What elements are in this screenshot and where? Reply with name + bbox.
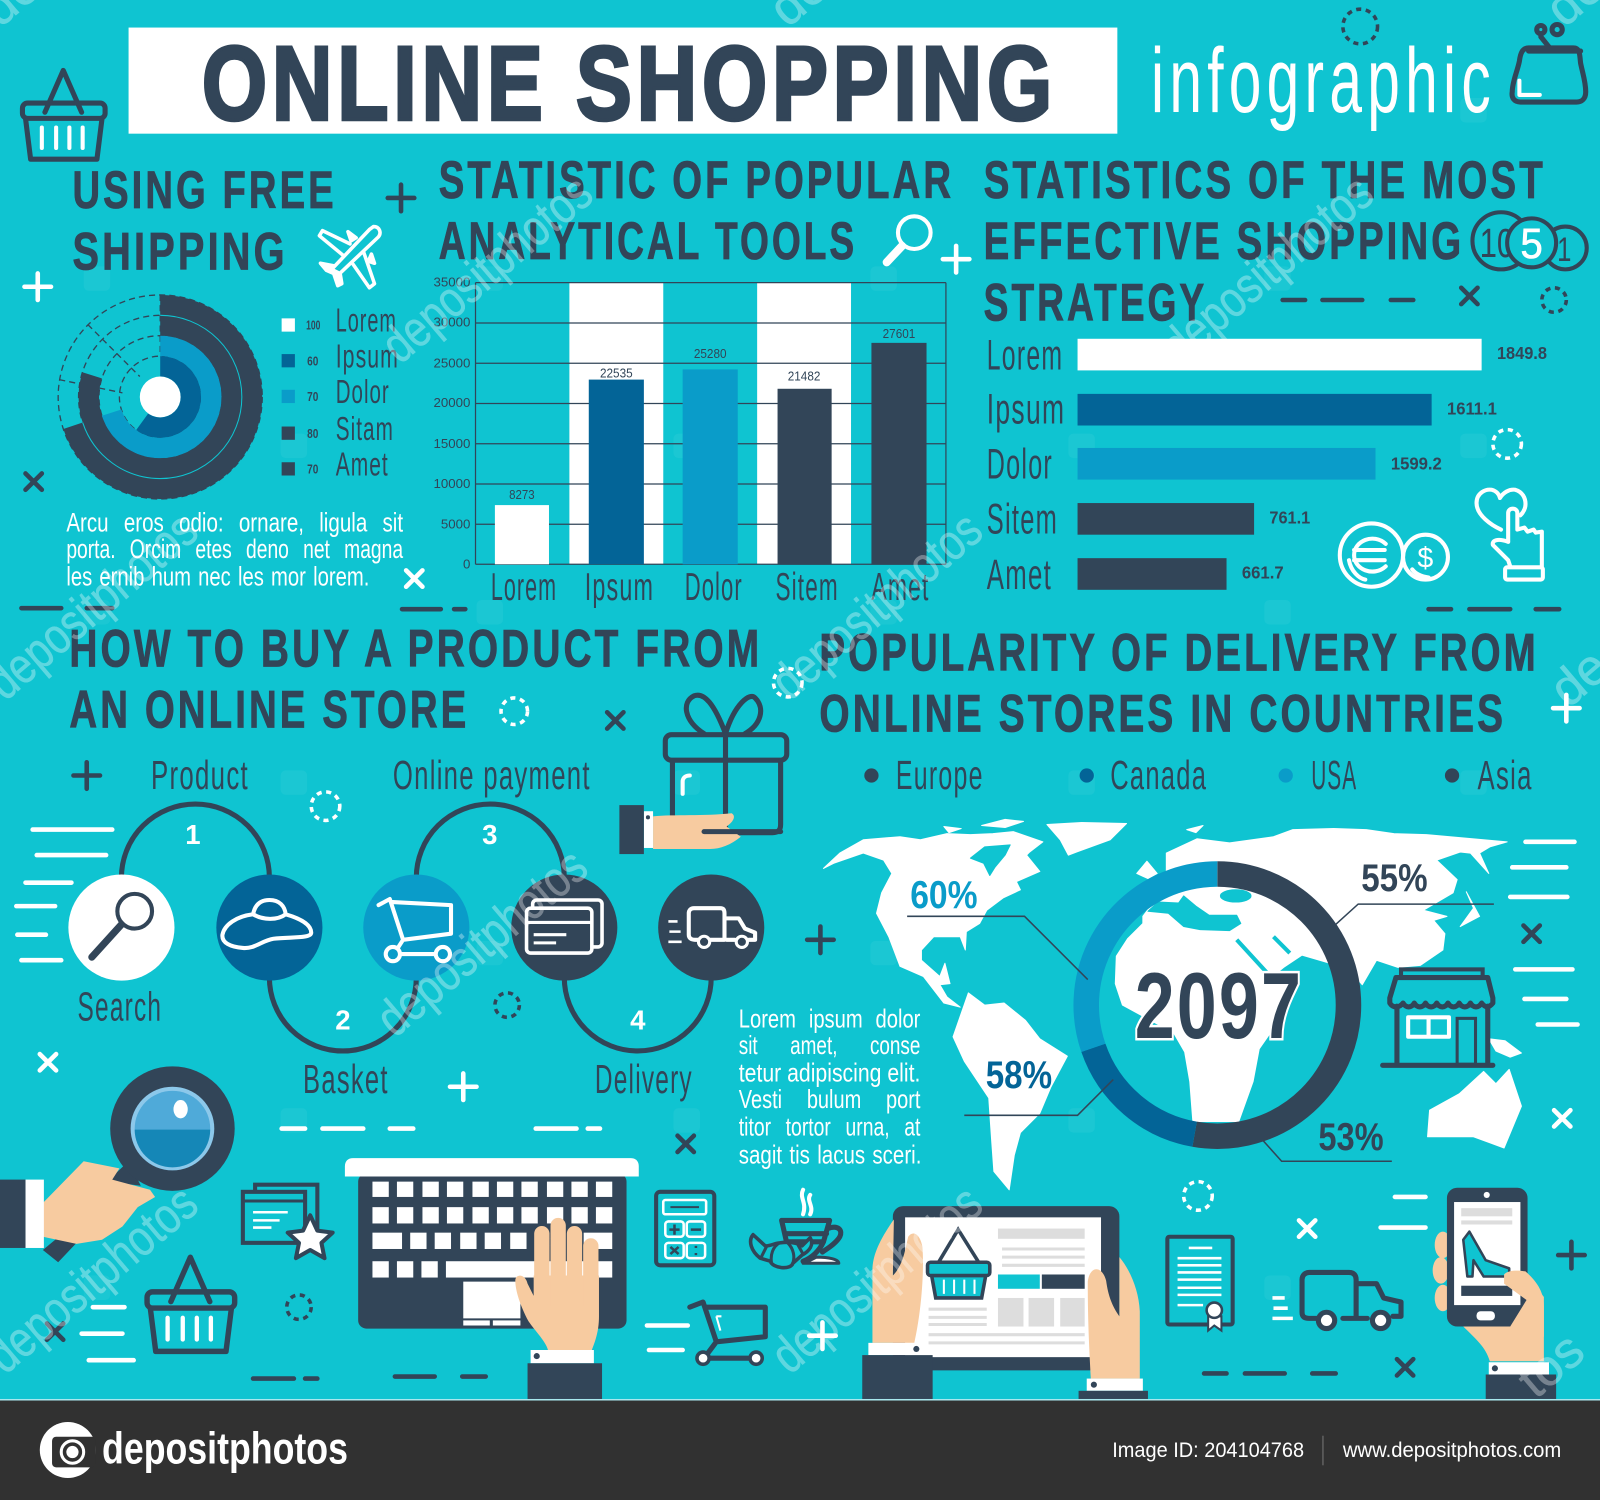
icon: airplane [319, 227, 380, 288]
bar chart: 25000 [434, 355, 470, 370]
heading: SHIPPING [72, 222, 288, 281]
illustration: phone in hand [1433, 1188, 1556, 1400]
bar chart: Dolor [685, 566, 743, 609]
title text: ONLINE SHOPPING [202, 25, 1057, 142]
panel: delivery popularity [819, 623, 1539, 1190]
heading: STATISTIC OF POPULAR [439, 151, 954, 210]
illustration: hand with magnifier [0, 1066, 235, 1262]
chart legend: 100 [306, 318, 320, 333]
paragraph: sit amet, conse [739, 1032, 920, 1060]
icon: certificate [1167, 1237, 1233, 1331]
step: basket: Basket [303, 1056, 389, 1102]
panel: analytical tools [434, 151, 954, 609]
step path [121, 804, 711, 1051]
radial donut chart [58, 295, 262, 499]
heading [439, 151, 954, 271]
illustration: tablet in hands [862, 1206, 1148, 1400]
icon: euro and dollar coins: $ [1417, 542, 1433, 574]
bar chart: 22535 [600, 366, 633, 381]
donut ring chart [1051, 838, 1384, 1172]
horizontal bar chart: Lorem [987, 331, 1063, 379]
icon: shopping cart [690, 1302, 765, 1364]
bar chart: 5000 [441, 517, 470, 532]
bar chart: 30000 [434, 315, 470, 330]
legend: USA [1311, 752, 1357, 798]
step: delivery: Delivery [595, 1056, 693, 1102]
panel: how to buy [68, 619, 921, 1169]
icon: magnifier [887, 216, 931, 262]
callout: 58% [964, 1054, 1113, 1115]
heading [984, 151, 1546, 332]
watermarks: depositphotos [365, 837, 598, 1047]
paragraph: titor tortor urna, at [739, 1114, 920, 1142]
step: basket [303, 874, 469, 1102]
icon: coins: 10 [1480, 220, 1514, 266]
chart legend: Ipsum [336, 338, 399, 375]
watermarks: depositphotos [370, 164, 603, 374]
panel: free shipping [58, 161, 404, 592]
callout: 55% [1336, 857, 1494, 924]
icon: coins: 1 [1557, 231, 1571, 269]
legend [864, 752, 1533, 798]
heading [72, 161, 337, 281]
horizontal bar chart: Dolor [987, 441, 1053, 489]
bar chart: Sitem [776, 566, 839, 609]
callout: 60%: 60% [910, 874, 978, 917]
chart legend: Sitam [336, 411, 394, 448]
callout: 55%: 55% [1361, 857, 1428, 900]
legend: Canada [1110, 752, 1207, 798]
step: product [151, 752, 322, 981]
paragraph: Lorem ipsum dolor [739, 1006, 921, 1034]
bar chart: Ipsum [585, 566, 654, 609]
step numbers: 4 [630, 1005, 646, 1036]
step numbers [185, 819, 646, 1036]
world map [823, 819, 1521, 1190]
step: online payment: Online payment [393, 752, 591, 798]
chart legend: 80 [307, 426, 318, 441]
watermarks: depositphotos [760, 500, 993, 710]
heading: HOW TO BUY A PRODUCT FROM [69, 619, 762, 678]
title banner [129, 25, 1117, 142]
watermarks: depositphotos [760, 1174, 993, 1384]
paragraph: sagit tis lacus sceri. [739, 1141, 921, 1169]
heading [819, 623, 1539, 744]
heading [69, 619, 762, 740]
heading: USING FREE [72, 161, 337, 220]
panel: shopping strategy [984, 151, 1587, 599]
icon: heart and hand [1477, 490, 1543, 580]
step numbers: 3 [482, 819, 497, 850]
watermarks: tos [1506, 1321, 1595, 1408]
chart legend [282, 303, 399, 484]
bar chart: 25280 [694, 346, 727, 361]
footer bar [0, 1399, 1600, 1500]
step numbers: 1 [185, 819, 201, 850]
horizontal bar chart: 661.7 [1242, 563, 1284, 583]
bar chart: Amet [871, 566, 930, 609]
watermarks: depositphotos [1151, 164, 1384, 374]
heading: STRATEGY [984, 273, 1207, 332]
icon: documents with star [243, 1185, 333, 1258]
callout: 53% [1263, 1116, 1392, 1161]
horizontal bar chart: 761.1 [1269, 507, 1311, 527]
icon: basket [22, 70, 105, 159]
total number: 2097 [1135, 953, 1303, 1058]
bar chart: 10000 [434, 476, 470, 491]
icon: purse [1512, 24, 1586, 102]
horizontal bar chart: 1611.1 [1447, 398, 1497, 418]
paragraph [739, 1006, 921, 1169]
horizontal bar chart: 1849.8 [1497, 343, 1547, 363]
horizontal bar chart: 1599.2 [1391, 453, 1442, 473]
icon: gift in hand [619, 695, 787, 854]
paragraph: Arcu eros odio: ornare, ligula sit [66, 508, 404, 538]
icon: shop [1383, 969, 1493, 1065]
chart legend: Lorem [336, 303, 397, 340]
bar chart [434, 275, 946, 609]
legend: Europe [896, 752, 984, 798]
horizontal bar chart: Amet [987, 551, 1052, 599]
horizontal bar chart: Sitem [987, 496, 1058, 544]
step: search: Search [78, 983, 162, 1029]
heading: ANALYTICAL TOOLS [439, 212, 857, 271]
step: product: Product [151, 752, 249, 798]
chart legend: 70 [307, 389, 318, 404]
bar chart: 27601 [883, 326, 915, 341]
paragraph [66, 508, 404, 592]
chart legend: 60 [307, 353, 318, 368]
step: online payment [393, 752, 617, 981]
callout: 58%: 58% [986, 1054, 1052, 1097]
bar chart: 35000 [434, 275, 470, 290]
icon: euro and dollar coins [1340, 523, 1448, 587]
icon: calculator [656, 1192, 714, 1265]
callout: 53%: 53% [1318, 1116, 1384, 1159]
footer logo [40, 1422, 348, 1478]
chart legend: Amet [336, 447, 389, 484]
legend: Asia [1478, 752, 1533, 798]
icon: coins [1472, 212, 1587, 269]
footer logo: depositphotos [102, 1422, 348, 1473]
bar chart: Lorem [491, 566, 557, 609]
paragraph: porta. Orcim etes deno net magna [66, 534, 403, 564]
paragraph: les ernib hum nec les mor lorem. [66, 562, 369, 592]
horizontal bar chart [987, 331, 1547, 599]
icon: coins: 5 [1520, 220, 1543, 268]
chart legend: Dolor [336, 374, 390, 411]
heading: AN ONLINE STORE [69, 681, 469, 740]
step: search [68, 874, 174, 1029]
horizontal bar chart: Ipsum [987, 385, 1065, 433]
icon: delivery truck [1272, 1272, 1401, 1329]
icon: coffee and croissant [751, 1190, 841, 1268]
website: www.depositphotos.com [1342, 1438, 1561, 1462]
image id: Image ID: 204104768 [1112, 1438, 1304, 1462]
illustration: hand on keyboard [515, 1226, 602, 1400]
step: delivery [595, 874, 764, 1102]
bar chart: 20000 [434, 395, 470, 410]
paragraph: tetur adipiscing elit. [739, 1060, 920, 1088]
chart legend: 70 [307, 461, 318, 476]
bar chart: 21482 [788, 369, 820, 384]
paragraph: Vesti bulum port [739, 1086, 920, 1114]
bar chart: 0 [463, 556, 470, 571]
step numbers: 2 [335, 1005, 351, 1036]
bar chart: 8273 [509, 487, 535, 502]
bar chart: 15000 [434, 436, 470, 451]
callout: 60% [907, 874, 1088, 980]
icon: basket small [147, 1257, 235, 1351]
illustration: laptop [345, 1158, 639, 1329]
